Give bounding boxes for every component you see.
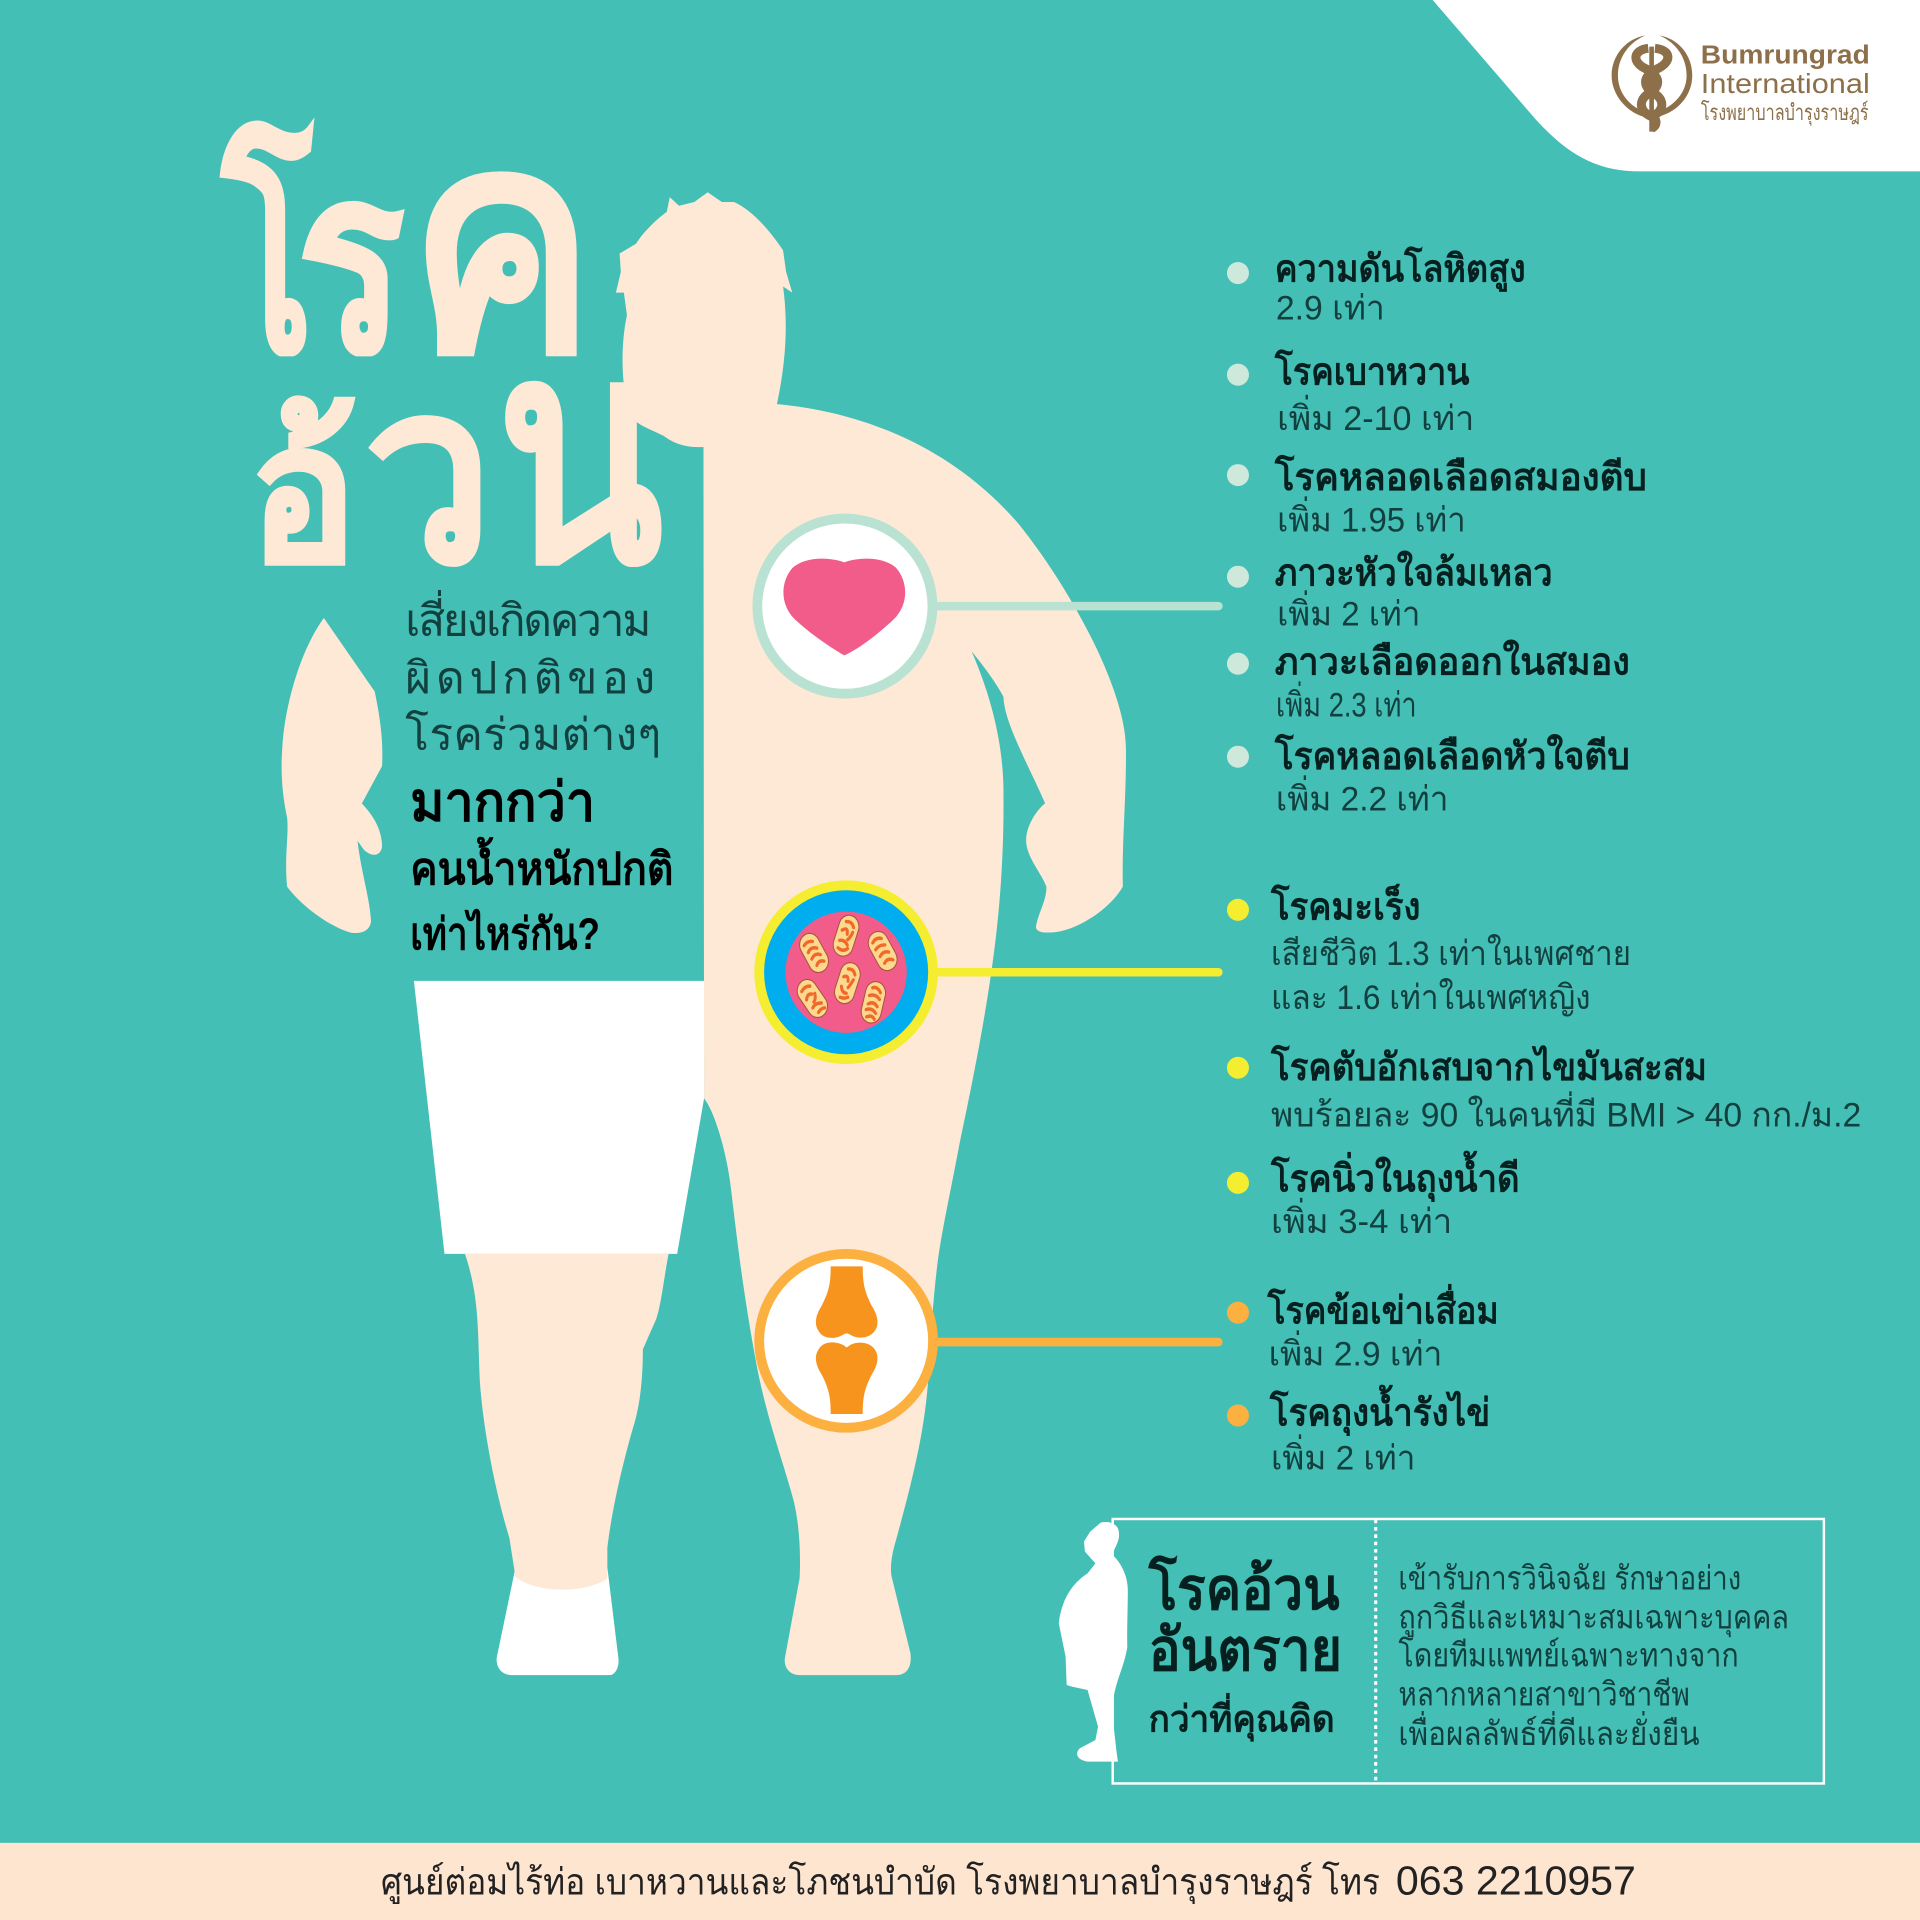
item: โรคข้อเข่าเสื่อม [1266, 1284, 1499, 1333]
knee bones [816, 1266, 877, 1414]
item: โรคหลอดเลือดสมองตีบ [1274, 454, 1647, 499]
bullet [1227, 899, 1249, 921]
title line 1: ร [296, 117, 405, 407]
callout body line 1: เข้ารับการวินิจฉัย รักษาอย่าง [1398, 1560, 1741, 1597]
item: ภาวะเลือดออกในสมอง [1275, 640, 1630, 684]
bullet [1227, 566, 1249, 588]
item: โรคนิ่วในถุงน้ำดี [1270, 1150, 1520, 1202]
item: ภาวะหัวใจล้มเหลว [1275, 550, 1553, 594]
value: เพิ่ม 2.9 เท่า [1269, 1330, 1442, 1373]
value: เพิ่ม 2.3 เท่า [1276, 681, 1417, 724]
question text block [405, 590, 673, 959]
bullet [1227, 1057, 1249, 1079]
dotted divider [1374, 1520, 1377, 1783]
bold line 2: คนน้ำหนักปกติ [410, 836, 673, 894]
intro line 3: โรคร่วมต่างๆ [405, 709, 661, 759]
heart [783, 559, 905, 655]
list: joint group [1227, 1284, 1499, 1477]
value: เพิ่ม 1.95 เท่า [1277, 496, 1466, 539]
callout heading 3: กว่าที่คุณคิด [1149, 1692, 1335, 1742]
connector: knee [937, 1339, 1218, 1346]
logo corner panel [1433, 0, 1920, 171]
shorts [414, 981, 704, 1254]
bold emphasis: มากกว่า [410, 772, 595, 832]
title line 1: โ [222, 124, 313, 405]
footer text: ศูนย์ต่อมไร้ท่อ เบาหวานและโภชนบำบัด โรงพยาบาลบำรุงราษฎร์ โทร [381, 1861, 1380, 1904]
sock [497, 1567, 619, 1675]
value: เพิ่ม 2.2 เท่า [1276, 776, 1449, 819]
bullet [1227, 746, 1249, 768]
title [220, 118, 662, 567]
icon: knee joint circle [759, 1254, 933, 1428]
title line 2: น [496, 279, 664, 628]
callout heading 1: โรคอ้วน [1148, 1554, 1340, 1622]
icon: heart circle [757, 519, 932, 694]
bullet [1227, 1404, 1249, 1427]
logo: Bumrungrad International [1612, 35, 1870, 132]
left leg [465, 1254, 669, 1590]
bullet [1227, 364, 1249, 386]
bullet [1227, 262, 1249, 284]
bullet [1227, 1302, 1249, 1324]
list: heart and brain group [1227, 246, 1647, 819]
callout body line 4: หลากหลายสาขาวิชาชีพ [1398, 1677, 1690, 1714]
item: ความดันโลหิตสูง [1275, 246, 1526, 293]
intro line 1: เสี่ยงเกิดความ [405, 590, 651, 646]
bold line 3: เท่าไหร่กัน? [410, 908, 600, 959]
item: โรคเบาหวาน [1274, 348, 1469, 393]
value: เพิ่ม 2 เท่า [1277, 591, 1420, 634]
value line 2: และ 1.6 เท่าในเพศหญิง [1271, 978, 1591, 1017]
item: โรคมะเร็ง [1270, 884, 1420, 929]
mitochondria [793, 912, 901, 1026]
bullet [1227, 653, 1249, 675]
title line 1: ค [408, 69, 596, 418]
item: โรคหลอดเลือดหัวใจตีบ [1274, 733, 1630, 778]
value: เพิ่ม 2 เท่า [1271, 1434, 1416, 1477]
title line 2: ว [364, 335, 493, 615]
value: พบร้อยละ 90 ในคนที่มี BMI > 40 กก./ม.2 [1271, 1092, 1861, 1135]
value: 2.9 เท่า [1276, 290, 1385, 328]
value line 1: เสียชีวิต 1.3 เท่าในเพศชาย [1271, 934, 1631, 973]
logo subtitle: International [1701, 68, 1870, 99]
list: abdominal group [1227, 884, 1861, 1241]
icon: side profile silhouette [1059, 1522, 1128, 1762]
bullet [1227, 1172, 1249, 1194]
logo name: Bumrungrad [1701, 42, 1870, 70]
callout body line 5: เพื่อผลลัพธ์ที่ดีและยั่งยืน [1398, 1711, 1700, 1753]
figure: obese man silhouette [282, 192, 1126, 1675]
left arm [282, 618, 382, 933]
footer phone: 063 2210957 [1396, 1857, 1636, 1903]
callout body line 3: โดยทีมแพทย์เฉพาะทางจาก [1398, 1637, 1739, 1675]
body right half and head [616, 192, 1126, 1675]
callout body line 2: ถูกวิธีและเหมาะสมเฉพาะบุคคล [1398, 1600, 1789, 1638]
title line 2: อ้ [250, 387, 356, 602]
item: โรคตับอักเสบจากไขมันสะสม [1270, 1044, 1707, 1089]
intro line 2: ผิดปกติของ [405, 654, 655, 703]
panel: obesity danger callout [1059, 1519, 1824, 1783]
icon: caduceus emblem [1612, 35, 1692, 132]
footer bar [0, 1843, 1920, 1920]
connector: liver [937, 969, 1218, 976]
connector: heart [937, 603, 1218, 610]
value: เพิ่ม 2-10 เท่า [1277, 395, 1474, 438]
box outline [1113, 1519, 1824, 1783]
callout heading 2: อันตราย [1149, 1618, 1342, 1683]
icon: liver cells circle [759, 885, 933, 1059]
title line 1 [220, 118, 577, 356]
title line 2 [256, 380, 662, 567]
item: โรคถุงน้ำรังไข่ [1269, 1384, 1490, 1436]
value: เพิ่ม 3-4 เท่า [1271, 1198, 1452, 1241]
bullet [1227, 464, 1249, 486]
